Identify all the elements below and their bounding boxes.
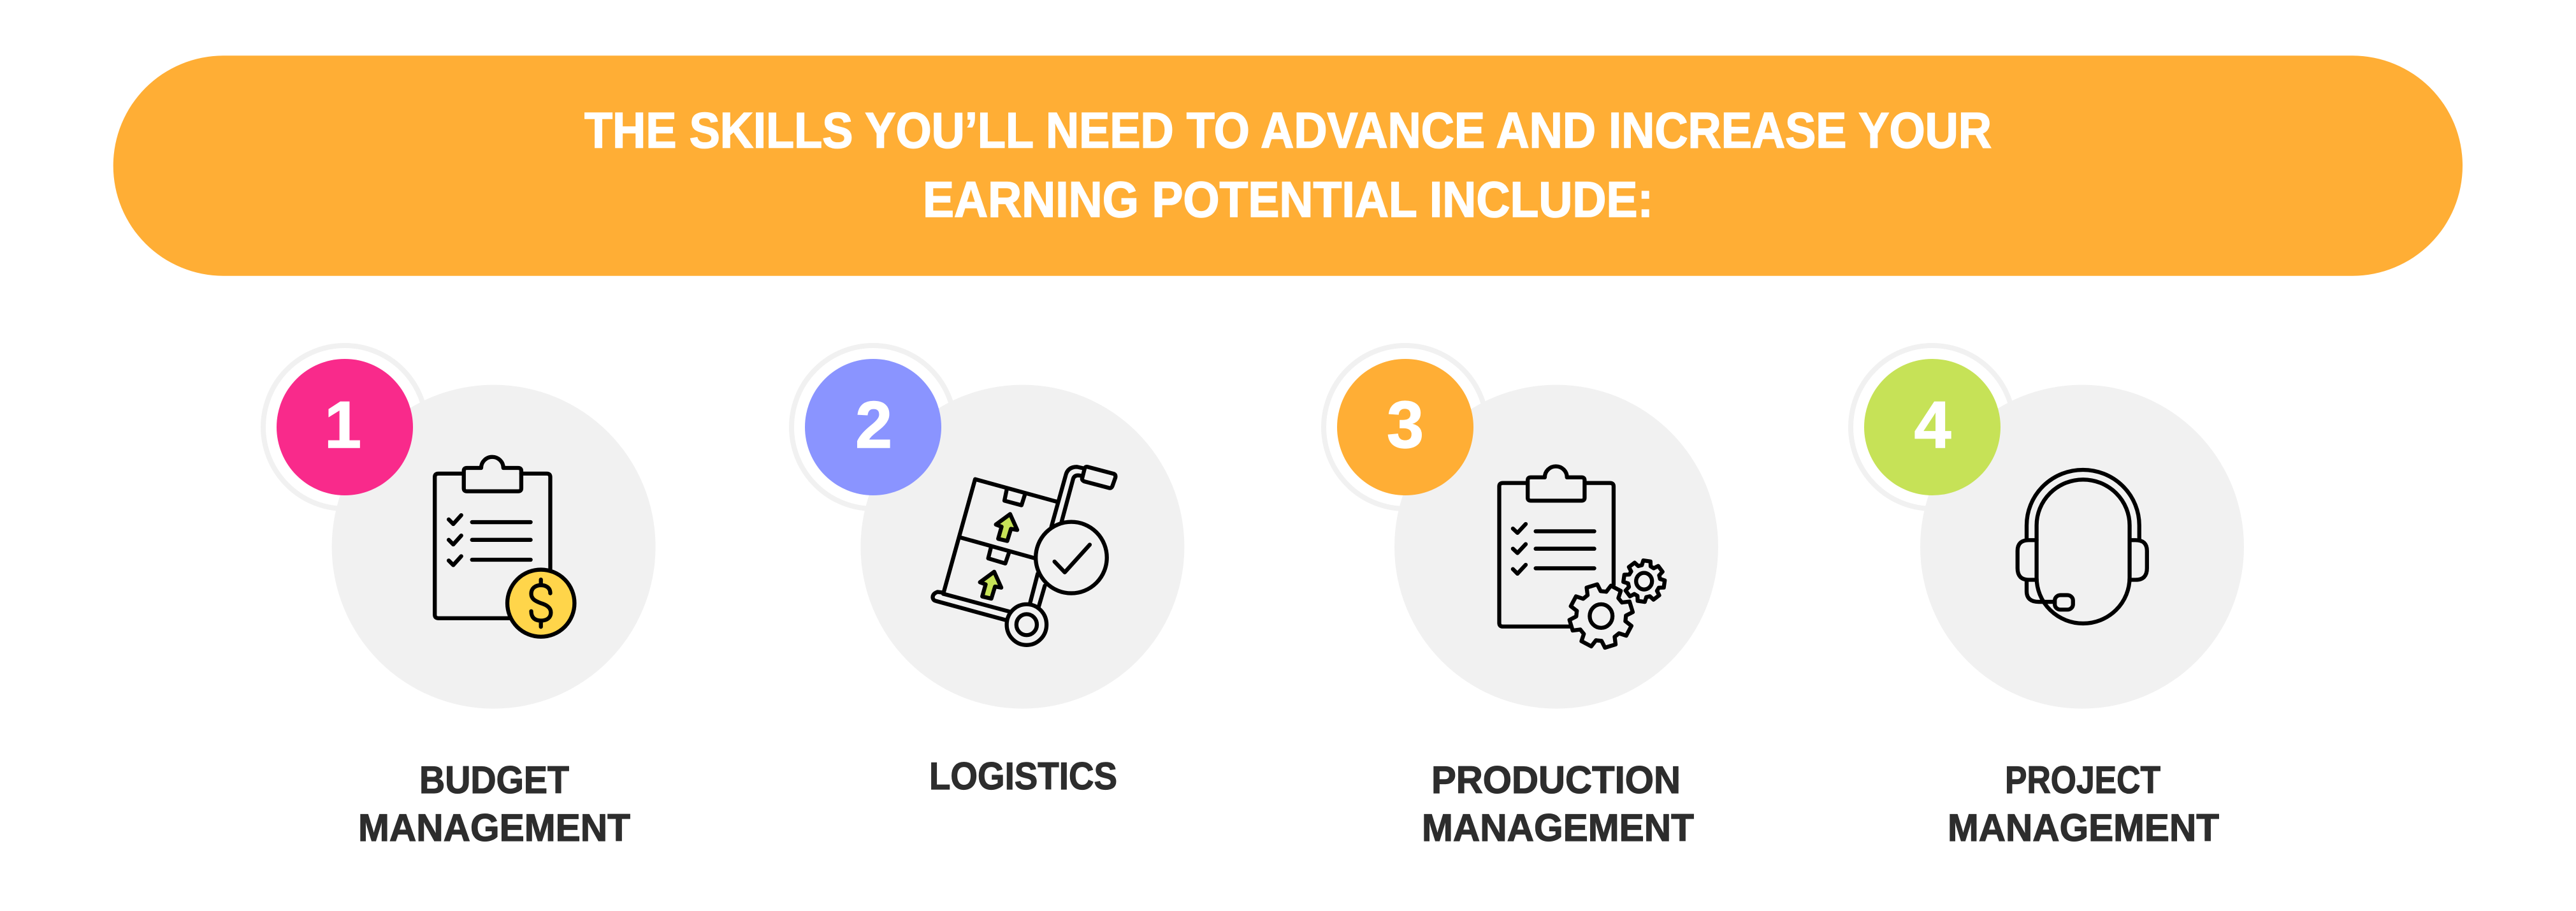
title [584, 103, 1992, 228]
icon: headset [2018, 470, 2147, 623]
badge ring 2 [792, 346, 955, 509]
label: production management: MANAGEMENT [1422, 806, 1694, 849]
label: production management [1422, 759, 1694, 849]
number badge 3 [1337, 359, 1473, 495]
icon: hand truck with boxes [933, 467, 1115, 645]
badge ring 4 [1851, 346, 2014, 509]
number badge 2 [805, 359, 941, 495]
icon: large gear [1568, 583, 1635, 650]
label: budget management: MANAGEMENT [358, 806, 630, 849]
background circle 3 [1394, 385, 1718, 709]
number badge 4: 4 [1914, 388, 1951, 462]
background circle 1 [332, 385, 656, 709]
panel: project management [1851, 346, 2244, 849]
panel: budget management [263, 346, 656, 849]
title: EARNING POTENTIAL INCLUDE: [923, 171, 1653, 228]
label: production management: PRODUCTION [1431, 759, 1681, 801]
label: budget management: BUDGET [419, 759, 569, 801]
banner [113, 55, 2463, 276]
number badge 1 [277, 359, 413, 495]
badge ring 3 [1324, 346, 1487, 509]
label: project management: PROJECT [2005, 759, 2160, 801]
icon: clipboard with gears [1499, 466, 1652, 628]
icon: clipboard with dollar coin [435, 457, 574, 637]
background circle 2 [860, 385, 1184, 709]
title: THE SKILLS YOU’LL NEED TO ADVANCE AND INCREASE YOUR [584, 103, 1992, 159]
number badge 1: 1 [324, 388, 361, 462]
panel: logistics [792, 346, 1184, 798]
label: budget management [358, 759, 630, 849]
label: logistics: LOGISTICS [929, 755, 1117, 798]
label: project management [1948, 759, 2219, 849]
number badge 3: 3 [1387, 388, 1424, 462]
number badge 2: 2 [855, 388, 892, 462]
number badge 4 [1864, 359, 2001, 495]
label: project management: MANAGEMENT [1948, 806, 2219, 849]
background circle 4 [1920, 385, 2244, 709]
badge ring 1 [263, 346, 426, 509]
panel: production management [1324, 346, 1718, 849]
icon: small gear [1623, 560, 1665, 602]
